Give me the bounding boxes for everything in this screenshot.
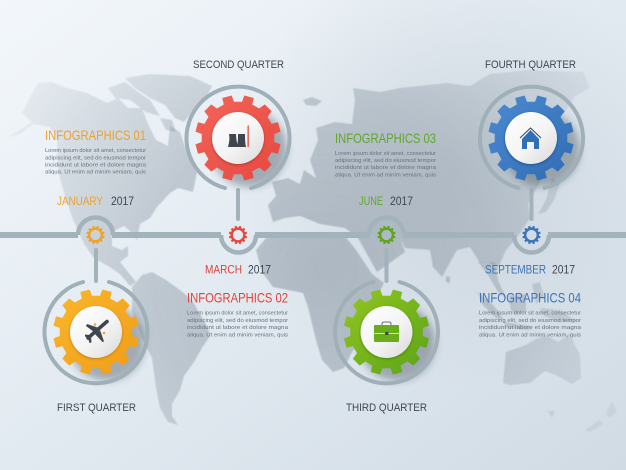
body: Infographics 01: aliqua. Ut enim ad minim veniam, quis xyxy=(45,170,146,176)
body: Infographics 04: adipiscing elit, sed do eiusmod tempor xyxy=(479,318,581,324)
body: Infographics 01: adipiscing elit, sed do eiusmod tempor xyxy=(45,155,146,161)
map: Malay peninsula and Sri Lanka xyxy=(446,262,506,298)
label: fourth quarter: FOURTH QUARTER xyxy=(485,59,576,71)
date: September 2017: 2017 xyxy=(552,262,575,276)
map: South America xyxy=(132,272,210,425)
gear: third quarter xyxy=(335,250,438,383)
body: Infographics 03: Lorem ipsum dolor sit amet, consectetur xyxy=(335,151,436,157)
gear: second quarter xyxy=(186,87,290,219)
body: Infographics 02: incididunt ut labore et dolore magna xyxy=(187,325,289,331)
icon: power plant xyxy=(228,125,249,147)
map: Australia xyxy=(503,333,581,385)
heading: Infographics 01: INFOGRAPHICS 01 xyxy=(45,127,146,143)
body: Infographics 04 xyxy=(479,310,582,338)
heading: Infographics 04: INFOGRAPHICS 04 xyxy=(479,290,581,306)
body: Infographics 02: adipiscing elit, sed do eiusmod tempor xyxy=(187,318,288,324)
body: Infographics 04: incididunt ut labore et dolore magna xyxy=(479,325,582,331)
label: second quarter: SECOND QUARTER xyxy=(193,59,284,71)
body: Infographics 02 xyxy=(187,310,289,338)
body: Infographics 02: Lorem ipsum dolor sit amet, consectetur xyxy=(187,310,288,316)
body: Infographics 02: aliqua. Ut enim ad minim veniam, quis xyxy=(187,332,288,338)
label: first quarter: FIRST QUARTER xyxy=(57,402,136,414)
milestone: September xyxy=(514,226,549,252)
body: Infographics 04: aliqua. Ut enim ad minim veniam, quis xyxy=(479,332,581,338)
body: Infographics 01: Lorem ipsum dolor sit amet, consectetur xyxy=(45,148,146,154)
body: Infographics 03: adipiscing elit, sed do eiusmod tempor xyxy=(335,158,436,164)
date: January 2017: JANUARY xyxy=(57,194,103,208)
text block: Infographics 03 xyxy=(335,130,437,178)
date: January 2017: 2017 xyxy=(111,194,134,208)
world map xyxy=(8,70,617,432)
body: Infographics 03: aliqua. Ut enim ad minim veniam, quis xyxy=(335,172,436,178)
map: Greenland xyxy=(125,74,212,122)
icon: house xyxy=(520,128,541,149)
map: North America xyxy=(8,82,197,286)
body: Infographics 03 xyxy=(335,151,437,178)
text block: Infographics 04 xyxy=(479,290,582,338)
map: Japan xyxy=(538,178,560,214)
map: New Zealand and Tasmania xyxy=(548,401,617,432)
date: March 2017: MARCH xyxy=(205,262,242,276)
date: September 2017: SEPTEMBER xyxy=(485,262,546,276)
date: June 2017: JUNE xyxy=(359,194,383,208)
map: Indonesia and Philippines xyxy=(478,282,578,330)
milestone: June xyxy=(369,218,404,244)
body: Infographics 01 xyxy=(45,148,147,176)
map: Eurasia xyxy=(268,70,590,277)
body: Infographics 03: incididunt ut labore et dolore magna xyxy=(335,165,437,171)
heading: Infographics 02: INFOGRAPHICS 02 xyxy=(187,290,288,306)
icon: briefcase xyxy=(374,322,399,342)
map: Africa xyxy=(256,233,384,372)
body: Infographics 04: Lorem ipsum dolor sit amet, consectetur xyxy=(479,310,581,316)
heading: Infographics 03: INFOGRAPHICS 03 xyxy=(335,130,436,146)
date: June 2017 xyxy=(359,194,413,208)
map: Iceland xyxy=(303,97,322,106)
date: March 2017 xyxy=(205,262,271,276)
gear: fourth quarter xyxy=(480,87,583,219)
milestone: January xyxy=(78,218,113,244)
text block: Infographics 01 xyxy=(45,127,147,176)
date: June 2017: 2017 xyxy=(390,194,413,208)
timeline line xyxy=(0,232,626,238)
label: third quarter: THIRD QUARTER xyxy=(346,402,427,414)
milestone: March xyxy=(221,226,256,252)
gear: first quarter xyxy=(45,250,148,383)
icon: airplane xyxy=(85,322,107,343)
date: March 2017: 2017 xyxy=(248,262,271,276)
map: Arctic islands xyxy=(108,82,176,132)
body: Infographics 01: incididunt ut labore et dolore magna xyxy=(45,162,147,168)
text block: Infographics 02 xyxy=(187,290,289,338)
